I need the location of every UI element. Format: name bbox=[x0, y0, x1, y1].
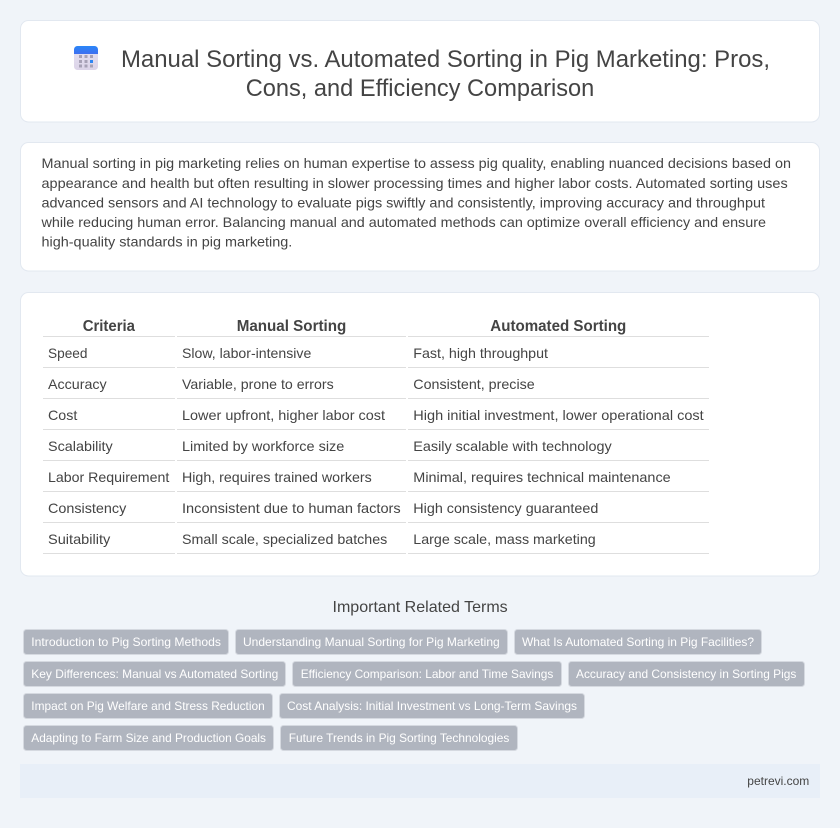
chip: understanding manual sorting bbox=[236, 630, 508, 654]
table row: labor requirement: Labor Requirement bbox=[48, 469, 169, 485]
title: Manual Sorting vs. Automated Sorting in Pig Marketing: Pros, bbox=[121, 46, 770, 73]
table row: speed: Slow, labor-intensive bbox=[182, 345, 312, 361]
table row: speed: Fast, high throughput bbox=[413, 345, 548, 361]
chip: introduction: Introduction to Pig Sorting Methods bbox=[31, 635, 221, 649]
chip: adapting to farm size: Adapting to Farm Size and Production Goals bbox=[31, 731, 266, 745]
table row: cost bbox=[48, 407, 704, 423]
table row: cost: Cost bbox=[48, 407, 77, 423]
table row: consistency bbox=[48, 500, 598, 516]
table row: scalability: Limited by workforce size bbox=[182, 438, 345, 454]
chip: efficiency comparison: Efficiency Comparison: Labor and Time Savings bbox=[301, 667, 553, 681]
footer: petrevi.com bbox=[747, 774, 809, 788]
table row: accuracy bbox=[48, 376, 535, 392]
table row: scalability: Easily scalable with technology bbox=[413, 438, 612, 454]
chip: accuracy and consistency bbox=[568, 662, 804, 686]
chip: accuracy and consistency: Accuracy and Consistency in Sorting Pigs bbox=[576, 667, 796, 681]
table row: accuracy: Accuracy bbox=[48, 376, 107, 392]
table header row: Manual Sorting bbox=[237, 318, 346, 335]
table header row: Automated Sorting bbox=[490, 318, 626, 335]
text block: summary paragraph bbox=[40, 155, 791, 250]
chip: key differences bbox=[24, 662, 286, 686]
table row: consistency: Consistency bbox=[48, 500, 126, 516]
chip: what is automated sorting bbox=[514, 630, 762, 654]
text block: summary paragraph: high-quality standards in pig marketing. bbox=[42, 234, 292, 250]
chip: efficiency comparison bbox=[292, 662, 562, 686]
table header row bbox=[83, 318, 626, 335]
table row: speed: Speed bbox=[48, 345, 88, 361]
table row: accuracy: Consistent, precise bbox=[413, 376, 535, 392]
table row: labor requirement: Minimal, requires technical maintenance bbox=[413, 469, 671, 485]
table row: scalability: Scalability bbox=[48, 438, 113, 454]
title bbox=[121, 46, 770, 102]
table row: suitability bbox=[48, 531, 596, 547]
text block: summary paragraph: while reducing human error. Balancing manual and automated methods can optimize overall efficiency and ensure bbox=[40, 214, 766, 230]
table row: consistency: Inconsistent due to human factors bbox=[182, 500, 401, 516]
chip: introduction bbox=[24, 630, 228, 654]
panel: related term chips bbox=[24, 630, 804, 750]
table header row: Criteria bbox=[83, 318, 135, 335]
table row: suitability: Large scale, mass marketing bbox=[413, 531, 596, 547]
chip: cost analysis: Cost Analysis: Initial Investment vs Long-Term Savings bbox=[287, 699, 577, 713]
text block: summary paragraph: Manual sorting in pig marketing relies on human expertise to assess pig quality, enabling nuanced decisions based on bbox=[42, 155, 791, 171]
chip: pig welfare: Impact on Pig Welfare and Stress Reduction bbox=[31, 699, 265, 713]
icon: calendar bbox=[74, 46, 98, 70]
heading: important related terms: Important Related Terms bbox=[332, 599, 508, 616]
chip: pig welfare bbox=[24, 694, 272, 718]
table row: scalability bbox=[48, 438, 612, 454]
panel: introduction text bbox=[20, 142, 820, 271]
chip: what is automated sorting: What Is Automated Sorting in Pig Facilities? bbox=[522, 635, 754, 649]
panel: title header bbox=[20, 20, 820, 122]
table row: suitability: Suitability bbox=[48, 531, 110, 547]
title: Cons, and Efficiency Comparison bbox=[246, 75, 594, 102]
text block: summary paragraph: advanced sensors and AI technology to evaluate pigs swiftly and consistently, improving accuracy and throughput bbox=[42, 194, 765, 210]
chip: adapting to farm size bbox=[24, 726, 274, 750]
chip: future trends: Future Trends in Pig Sorting Technologies bbox=[289, 731, 509, 745]
panel: comparison table bbox=[20, 292, 820, 576]
table row: labor requirement bbox=[48, 469, 671, 485]
table row: labor requirement: High, requires trained workers bbox=[182, 469, 372, 485]
chip: cost analysis bbox=[280, 694, 584, 718]
chip: future trends bbox=[280, 726, 518, 750]
table row: cost: Lower upfront, higher labor cost bbox=[182, 407, 385, 423]
chip: key differences: Key Differences: Manual vs Automated Sorting bbox=[31, 667, 278, 681]
table row: suitability: Small scale, specialized batches bbox=[182, 531, 387, 547]
table row: accuracy: Variable, prone to errors bbox=[182, 376, 334, 392]
table row: speed bbox=[48, 345, 548, 361]
footer bbox=[20, 764, 820, 798]
chip: understanding manual sorting: Understanding Manual Sorting for Pig Marketing bbox=[243, 635, 500, 649]
table row: consistency: High consistency guaranteed bbox=[413, 500, 598, 516]
text block: summary paragraph: appearance and health but often resulting in slower processing times and higher labor costs. Automated sorting uses bbox=[42, 175, 788, 191]
table row: cost: High initial investment, lower operational cost bbox=[413, 407, 704, 423]
